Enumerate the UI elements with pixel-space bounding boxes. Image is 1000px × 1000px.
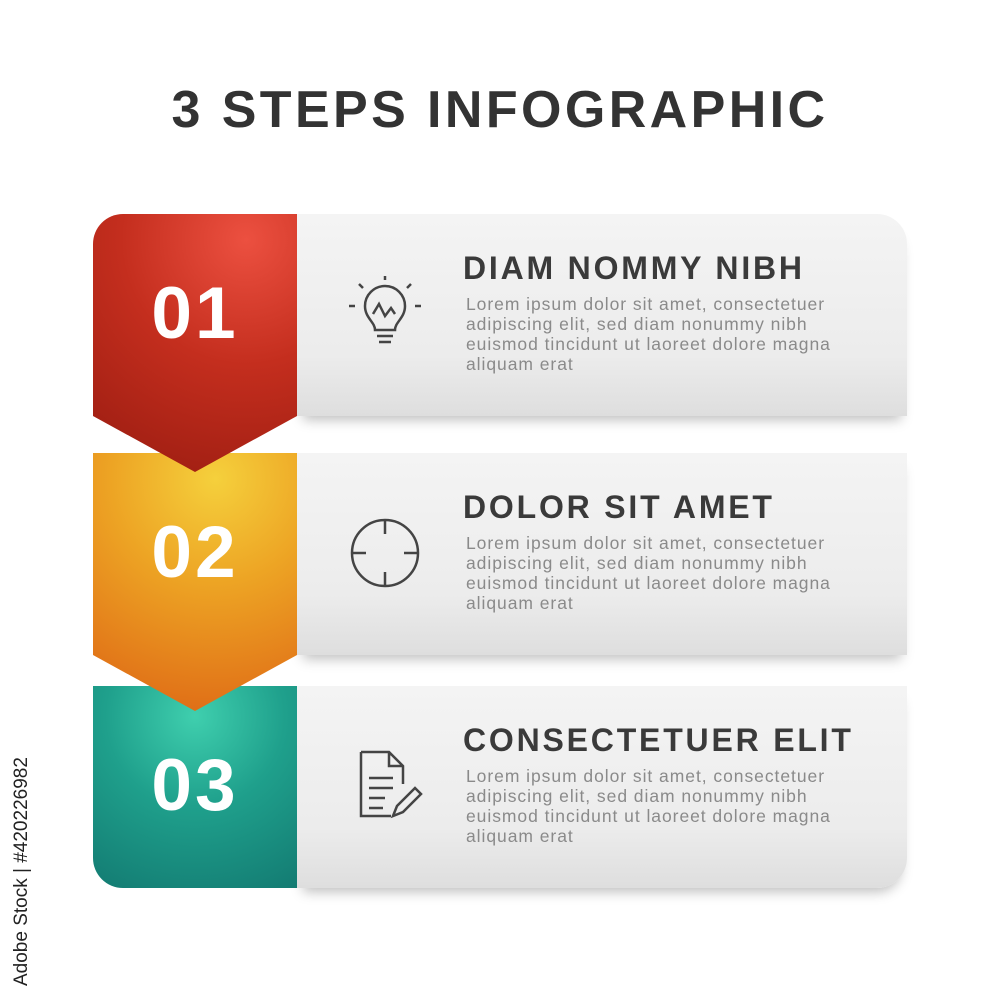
- panel: step 3: [297, 686, 907, 888]
- number 01: 01: [151, 273, 239, 354]
- text 2: aliquam erat: [466, 593, 574, 613]
- text 2: adipiscing elit, sed diam nonummy nibh: [466, 553, 808, 573]
- text 1: [466, 294, 831, 374]
- icon: lightbulb: [349, 276, 421, 344]
- text 2: Lorem ipsum dolor sit amet, consectetuer: [466, 533, 825, 553]
- text 3: aliquam erat: [466, 826, 574, 846]
- step 3 badge: [93, 686, 297, 888]
- watermark id: Adobe Stock | #420226982: [11, 757, 32, 986]
- text 2: euismod tincidunt ut laoreet dolore magna: [466, 573, 831, 593]
- text 1: Lorem ipsum dolor sit amet, consectetuer: [466, 294, 825, 314]
- step 2 badge: [93, 453, 297, 711]
- icon: target: [350, 518, 420, 588]
- text 3: [466, 766, 831, 846]
- panel: step 2: [297, 453, 907, 655]
- icon: document pen: [360, 750, 423, 818]
- text 1: euismod tincidunt ut laoreet dolore magna: [466, 334, 831, 354]
- step 1 badge: [93, 214, 297, 472]
- text 3: adipiscing elit, sed diam nonummy nibh: [466, 786, 808, 806]
- heading 2: DOLOR SIT AMET: [463, 489, 775, 525]
- text 1: adipiscing elit, sed diam nonummy nibh: [466, 314, 808, 334]
- title: 3 STEPS INFOGRAPHIC: [172, 81, 828, 139]
- heading 3: CONSECTETUER ELIT: [463, 722, 854, 758]
- number 03: 03: [151, 745, 239, 826]
- number 02: 02: [151, 512, 239, 593]
- text 2: [466, 533, 831, 613]
- panel: step 1: [297, 214, 907, 416]
- text 3: euismod tincidunt ut laoreet dolore magna: [466, 806, 831, 826]
- heading 1: DIAM NOMMY NIBH: [463, 250, 805, 286]
- text 3: Lorem ipsum dolor sit amet, consectetuer: [466, 766, 825, 786]
- text 1: aliquam erat: [466, 354, 574, 374]
